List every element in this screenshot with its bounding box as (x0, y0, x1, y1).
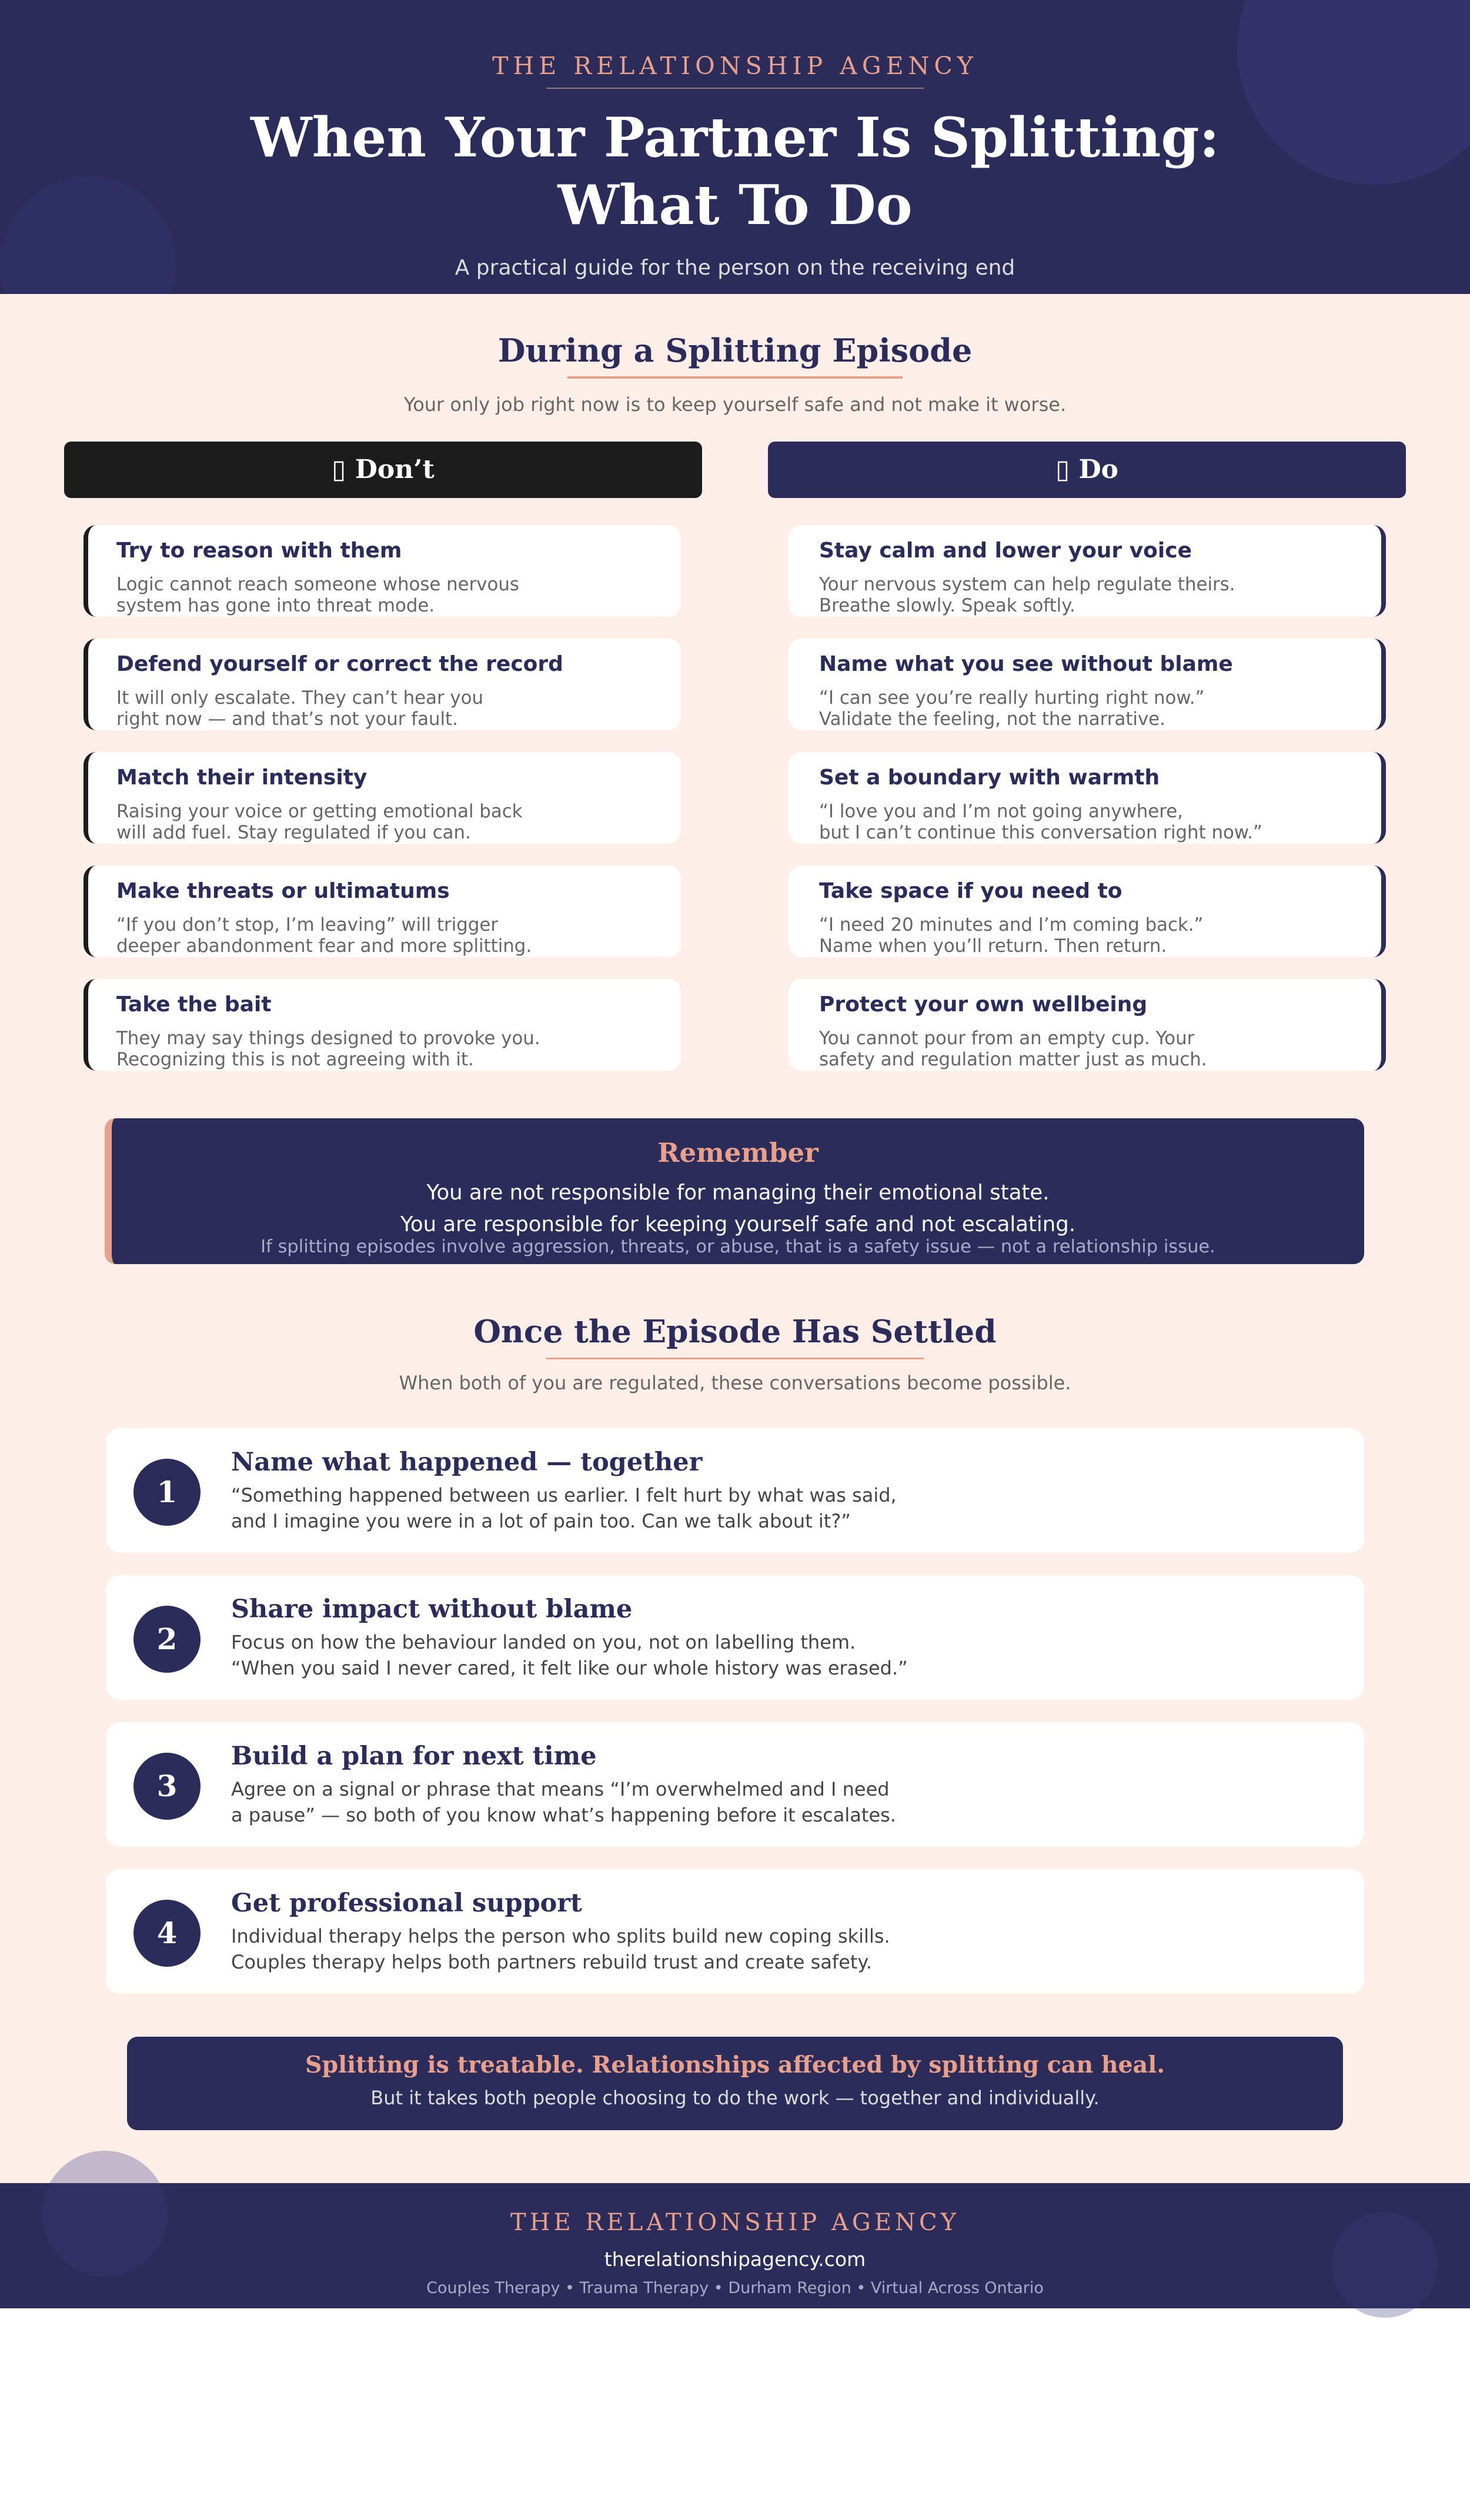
step 4: 4 (157, 1916, 177, 1950)
do card 4: Take space if you need to (819, 879, 1122, 903)
step 3: Build a plan for next time (231, 1742, 597, 1771)
step 4 (106, 1869, 1364, 1994)
panel: do list (789, 525, 1386, 1071)
section subtitle: Your only job right now is to keep yourself safe and not make it worse. (404, 393, 1066, 416)
do card 2: Name what you see without blame (819, 652, 1233, 676)
section heading: during: During a Splitting Episode (498, 332, 972, 369)
do card 5: Protect your own wellbeing (819, 992, 1147, 1017)
title: When Your Partner Is Splitting: (250, 105, 1220, 169)
step 1 (106, 1428, 1364, 1553)
do card 3: “I love you and I’m not going anywhere, (819, 801, 1183, 822)
footer agency name: THE RELATIONSHIP AGENCY (510, 2209, 960, 2236)
closing callout: Splitting is treatable. Relationships affected by splitting can heal. (305, 2051, 1165, 2078)
don't card 2 (83, 639, 681, 730)
don't card 2: right now — and that’s not your fault. (116, 708, 458, 730)
do card 1: Breathe slowly. Speak softly. (819, 595, 1075, 616)
callout: remember (105, 1118, 1364, 1264)
section heading: settled: Once the Episode Has Settled (473, 1313, 997, 1350)
step 1: “Something happened between us earlier. I felt hurt by what was said, (231, 1484, 897, 1506)
don't card 4: deeper abandonment fear and more splitting. (116, 935, 532, 957)
step 3: 3 (157, 1769, 177, 1803)
do card 1: Stay calm and lower your voice (819, 539, 1192, 563)
step 3: a pause” — so both of you know what’s happening before it escalates. (231, 1804, 896, 1826)
header: don't (64, 442, 702, 498)
callout: remember: You are responsible for keeping yourself safe and not escalating. (400, 1212, 1075, 1236)
footer (0, 2183, 1470, 2308)
step 2: 2 (157, 1622, 177, 1656)
callout: remember: You are not responsible for managing their emotional state. (426, 1181, 1050, 1205)
step 1: and I imagine you were in a lot of pain too. Can we talk about it?” (231, 1510, 851, 1532)
don't card 4 (83, 865, 681, 957)
don't card 5: Recognizing this is not agreeing with it. (116, 1049, 474, 1070)
do card 5: safety and regulation matter just as much. (819, 1049, 1207, 1070)
don't card 3: Match their intensity (116, 766, 367, 790)
callout: remember: Remember (657, 1137, 818, 1168)
header: do: ▯ Do (1055, 454, 1118, 484)
header: do (768, 442, 1406, 498)
step 2: Share impact without blame (231, 1595, 632, 1624)
don't card 2: Defend yourself or correct the record (116, 652, 563, 676)
do card 3: Set a boundary with warmth (819, 766, 1160, 790)
step 3 (106, 1722, 1364, 1847)
footer tags: Couples Therapy • Trauma Therapy • Durham Region • Virtual Across Ontario (426, 2279, 1044, 2297)
footer url: therelationshipagency.com (604, 2248, 866, 2271)
don't card 5: Take the bait (116, 992, 272, 1017)
do card 2: Validate the feeling, not the narrative. (819, 708, 1165, 730)
don't card 2: It will only escalate. They can’t hear you (116, 687, 483, 708)
don't card 4: “If you don’t stop, I’m leaving” will trigger (116, 914, 498, 935)
do card 1: Your nervous system can help regulate theirs. (819, 574, 1235, 595)
callout: remember: If splitting episodes involve aggression, threats, or abuse, that is a safety issue — not a relationship issue. (260, 1236, 1215, 1257)
step 2: Focus on how the behaviour landed on you, not on labelling them. (231, 1631, 856, 1653)
section subtitle: When both of you are regulated, these conversations become possible. (399, 1372, 1071, 1394)
header (0, 0, 1470, 294)
title: What To Do (557, 173, 913, 237)
title (250, 105, 1220, 237)
header: don't: ▯ Don’t (332, 454, 435, 484)
do card 5: You cannot pour from an empty cup. Your (819, 1028, 1194, 1049)
do card 2: “I can see you’re really hurting right now.” (819, 687, 1205, 708)
subtitle: A practical guide for the person on the receiving end (455, 256, 1015, 280)
step 4: Individual therapy helps the person who splits build new coping skills. (231, 1925, 890, 1947)
header agency name: THE RELATIONSHIP AGENCY (492, 52, 978, 80)
don't card 5: They may say things designed to provoke you. (116, 1028, 540, 1049)
background beige (0, 294, 1470, 2183)
don't card 3: Raising your voice or getting emotional back (116, 801, 522, 822)
step 4: Get professional support (231, 1889, 582, 1918)
step 3: Agree on a signal or phrase that means “I’m overwhelmed and I need (231, 1778, 890, 1800)
don't card 1 (83, 525, 681, 617)
don't card 1: Logic cannot reach someone whose nervous (116, 574, 519, 595)
step 4: Couples therapy helps both partners rebuild trust and create safety. (231, 1951, 872, 1973)
don't card 3 (83, 752, 681, 844)
do card 2 (789, 639, 1386, 730)
do card 1 (789, 525, 1386, 617)
don't card 1: Try to reason with them (116, 539, 402, 563)
do card 4 (789, 865, 1386, 957)
do card 3: but I can’t continue this conversation right now.” (819, 822, 1262, 843)
step 2: “When you said I never cared, it felt like our whole history was erased.” (231, 1657, 908, 1679)
don't card 5 (83, 979, 681, 1071)
don't card 3: will add fuel. Stay regulated if you can. (116, 822, 471, 843)
do card 4: “I need 20 minutes and I’m coming back.” (819, 914, 1204, 935)
step 2 (106, 1575, 1364, 1700)
decorative circles (42, 2151, 168, 2277)
step 1: 1 (157, 1475, 177, 1509)
closing callout: But it takes both people choosing to do the work — together and individually. (370, 2087, 1100, 2109)
don't card 1: system has gone into threat mode. (116, 595, 435, 616)
do card 4: Name when you’ll return. Then return. (819, 935, 1167, 957)
don't card 4: Make threats or ultimatums (116, 879, 450, 903)
closing callout (127, 2037, 1343, 2130)
panel: don't list (83, 525, 681, 1071)
step 1: Name what happened — together (231, 1448, 702, 1477)
do card 3 (789, 752, 1386, 844)
do card 5 (789, 979, 1386, 1071)
